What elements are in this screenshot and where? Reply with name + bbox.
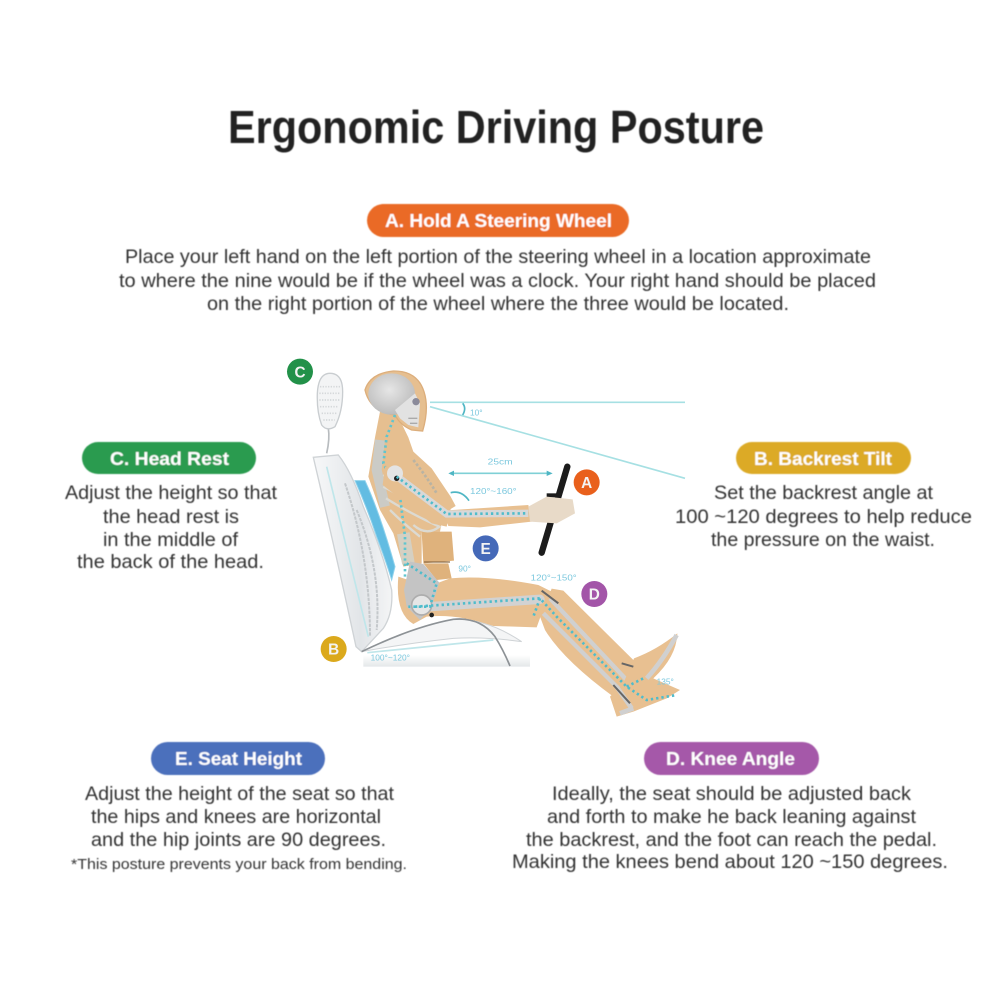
label pill B: B. Backrest Tilt	[754, 448, 892, 469]
label pill D	[644, 742, 819, 775]
foot bones	[617, 635, 677, 713]
text block E: and the hip joints are 90 degrees.	[91, 829, 386, 851]
marker circle B	[321, 636, 347, 662]
label pill C: C. Head Rest	[110, 448, 229, 469]
knee and ankle joints	[542, 591, 633, 703]
seat cushion and base	[362, 619, 530, 667]
marker circle A	[574, 469, 600, 495]
text block A: Place your left hand on the left portion of the steering wheel in a location approximate	[125, 246, 871, 268]
text block C	[65, 482, 278, 573]
foot	[610, 633, 680, 717]
sight lines with 10 degree angle: 10°	[470, 407, 483, 417]
section C: head rest	[65, 442, 278, 573]
text block E	[71, 783, 407, 873]
marker circle D	[581, 581, 607, 607]
text block B: Set the backrest angle at	[714, 482, 934, 504]
text block D: and forth to make he back leaning against	[547, 806, 917, 828]
text block E: *This posture prevents your back from bending.	[71, 856, 407, 873]
forearm	[443, 505, 532, 527]
title: Ergonomic Driving Posture	[228, 101, 764, 153]
seat backrest	[313, 455, 392, 652]
thigh	[398, 577, 552, 627]
seated driver posture diagram	[287, 359, 685, 717]
elbow angle marker	[451, 486, 517, 501]
section E: seat height	[71, 742, 407, 873]
text block D: the backrest, and the foot can reach the pedal.	[526, 829, 937, 851]
label pill D: D. Knee Angle	[666, 748, 795, 769]
ankle angle label: 135°	[657, 676, 674, 686]
label pill A	[367, 204, 629, 237]
seat cushion and base: 100°~120°	[371, 653, 410, 663]
label pill E	[151, 742, 325, 775]
torso, neck and pelvis	[368, 412, 456, 580]
section B: backrest tilt	[675, 442, 972, 551]
marker circle C	[287, 359, 313, 385]
marker circle C: C	[294, 364, 306, 381]
text block C: the head rest is	[103, 506, 239, 528]
marker circle E: E	[481, 541, 491, 558]
steering wheel	[542, 467, 567, 553]
section D: knee angle	[512, 742, 948, 873]
label pill E: E. Seat Height	[175, 748, 302, 769]
hip bone	[404, 562, 439, 620]
text block A: to where the nine would be if the wheel was a clock. Your right hand should be placed	[119, 270, 876, 292]
hip 90 degree label: 90°	[458, 563, 471, 573]
elbow angle marker: 120°~160°	[470, 486, 517, 496]
knee angle label: 120°~150°	[531, 572, 577, 582]
sight lines with 10 degree angle	[430, 402, 685, 478]
lumbar support cushion	[355, 481, 395, 580]
text block D: Ideally, the seat should be adjusted back	[552, 783, 911, 805]
label pill B	[736, 442, 911, 474]
lower leg	[540, 589, 643, 697]
text block E: Adjust the height of the seat so that	[85, 783, 395, 805]
text block E: the hips and knees are horizontal	[91, 806, 381, 828]
shin bones	[543, 598, 627, 690]
text block B: 100 ~120 degrees to help reduce	[675, 506, 972, 528]
text block B: the pressure on the waist.	[711, 529, 935, 551]
text block C: the back of the head.	[77, 551, 264, 573]
text block D	[512, 783, 948, 873]
hip joint	[412, 595, 434, 617]
marker circle A: A	[581, 475, 592, 492]
marker circle B: B	[328, 642, 339, 659]
label pill A: A. Hold A Steering Wheel	[385, 210, 612, 231]
text block D: Making the knees bend about 120 ~150 degrees.	[512, 851, 948, 873]
25cm distance arrow: 25cm	[488, 456, 513, 466]
text block C: Adjust the height so that	[65, 482, 278, 504]
25cm distance arrow	[448, 456, 553, 476]
label pill C	[82, 442, 256, 474]
marker circle E	[473, 535, 499, 561]
head rest	[317, 373, 343, 453]
shoulder joint	[387, 465, 403, 481]
femur bone	[420, 599, 540, 607]
marker circle D: D	[589, 587, 600, 604]
section A: hold a steering wheel	[119, 204, 876, 315]
neck and spine dotted line	[383, 415, 405, 600]
text block C: in the middle of	[103, 529, 239, 551]
arm bones	[395, 475, 528, 514]
hand on wheel	[528, 497, 575, 523]
head with skull	[365, 371, 426, 431]
text block B	[675, 482, 972, 551]
dotted skeletal guide lines	[397, 477, 677, 700]
upper arm	[383, 465, 451, 527]
text block A: on the right portion of the wheel where the three would be located.	[207, 293, 789, 315]
text block A	[119, 246, 876, 315]
